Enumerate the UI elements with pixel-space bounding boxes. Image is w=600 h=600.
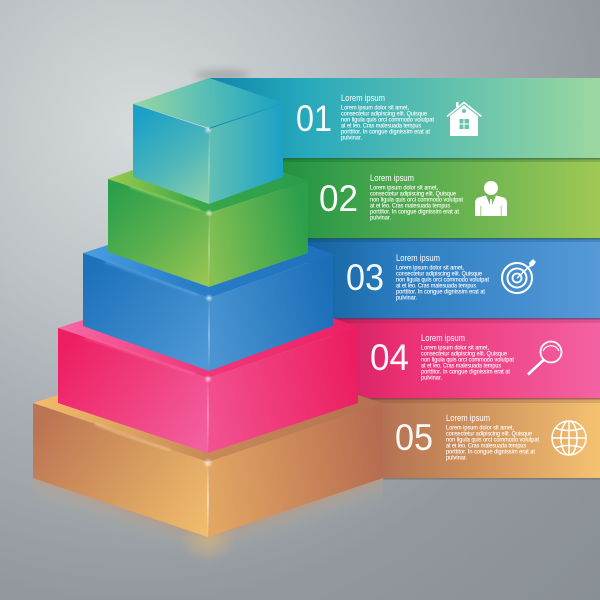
text block 04: Lorem ipsum bbox=[421, 333, 465, 343]
text block 01: pulvinar. bbox=[341, 136, 362, 142]
step 5: orange block bbox=[33, 395, 383, 537]
floor reflection bbox=[33, 478, 383, 569]
text block 03: porttitor. In congue dignissim erat at bbox=[396, 290, 485, 296]
number 05: 05 bbox=[395, 417, 433, 458]
text block 02: porttitor. In congue dignissim erat at bbox=[370, 210, 459, 216]
text block 03: non ligula quis orci commodo volutpat bbox=[396, 278, 489, 284]
step 3: blue block bbox=[83, 245, 333, 371]
text block 05: Lorem ipsum bbox=[446, 413, 490, 423]
text block 02: non ligula quis orci commodo volutpat bbox=[370, 198, 463, 204]
text block 03: pulvinar. bbox=[396, 296, 417, 302]
text block 04: porttitor. In congue dignissim erat at bbox=[421, 370, 510, 376]
text block 03: consectetur adipiscing elit. Quisque bbox=[396, 272, 483, 278]
text block 04 bbox=[421, 333, 514, 382]
icon: target with arrow bbox=[502, 259, 536, 293]
text block 04: consectetur adipiscing elit. Quisque bbox=[421, 352, 508, 358]
text block 01: Lorem ipsum bbox=[341, 93, 385, 103]
shadow above ribbon start bbox=[194, 70, 250, 80]
ribbon 2 bbox=[283, 158, 600, 240]
icon: businessman bbox=[475, 181, 507, 216]
ribbon 4 bbox=[333, 318, 600, 400]
text block 02: Lorem ipsum bbox=[370, 173, 414, 183]
text block 01: at et leo. Cras malesuada tempus bbox=[341, 124, 421, 130]
text block 02: consectetur adipiscing elit. Quisque bbox=[370, 192, 457, 198]
text block 05: pulvinar. bbox=[446, 456, 467, 462]
text block 01: consectetur adipiscing elit. Quisque bbox=[341, 112, 428, 118]
number 01: 01 bbox=[296, 98, 332, 139]
number 02: 02 bbox=[319, 178, 358, 219]
text block 04: at et leo. Cras malesuada tempus bbox=[421, 364, 501, 370]
step 1: teal cube bbox=[133, 78, 283, 204]
icon: house bbox=[447, 102, 482, 136]
step 2: green block bbox=[108, 170, 308, 287]
text block 05: at et leo. Cras malesuada tempus bbox=[446, 444, 526, 450]
text block 01 bbox=[341, 93, 434, 142]
text block 05: porttitor. In congue dignissim erat at bbox=[446, 450, 535, 456]
text block 02: pulvinar. bbox=[370, 216, 391, 222]
text block 05: consectetur adipiscing elit. Quisque bbox=[446, 432, 533, 438]
text block 02 bbox=[370, 173, 463, 222]
ribbon 5 bbox=[358, 398, 600, 480]
ribbon 1 bbox=[209, 78, 600, 160]
text block 05 bbox=[446, 413, 539, 462]
step 4: pink block bbox=[58, 318, 358, 453]
text block 01: Lorem ipsum dolor sit amet, bbox=[341, 106, 409, 112]
text block 04: Lorem ipsum dolor sit amet, bbox=[421, 346, 489, 352]
icon: globe bbox=[552, 421, 586, 455]
ribbon 3 bbox=[308, 238, 600, 320]
number 03: 03 bbox=[346, 257, 384, 298]
text block 01: porttitor. In congue dignissim erat at bbox=[341, 130, 430, 136]
text block 02: Lorem ipsum dolor sit amet, bbox=[370, 186, 438, 192]
number 04: 04 bbox=[370, 337, 409, 378]
text block 03: Lorem ipsum bbox=[396, 253, 440, 263]
text block 02: at et leo. Cras malesuada tempus bbox=[370, 204, 450, 210]
icon: magnifier bbox=[528, 342, 562, 374]
text block 01: non ligula quis orci commodo volutpat bbox=[341, 118, 434, 124]
text block 05: Lorem ipsum dolor sit amet, bbox=[446, 426, 514, 432]
text block 03 bbox=[396, 253, 489, 302]
text block 03: Lorem ipsum dolor sit amet, bbox=[396, 266, 464, 272]
text block 05: non ligula quis orci commodo volutpat bbox=[446, 438, 539, 444]
text block 04: non ligula quis orci commodo volutpat bbox=[421, 358, 514, 364]
text block 04: pulvinar. bbox=[421, 376, 442, 382]
text block 03: at et leo. Cras malesuada tempus bbox=[396, 284, 476, 290]
